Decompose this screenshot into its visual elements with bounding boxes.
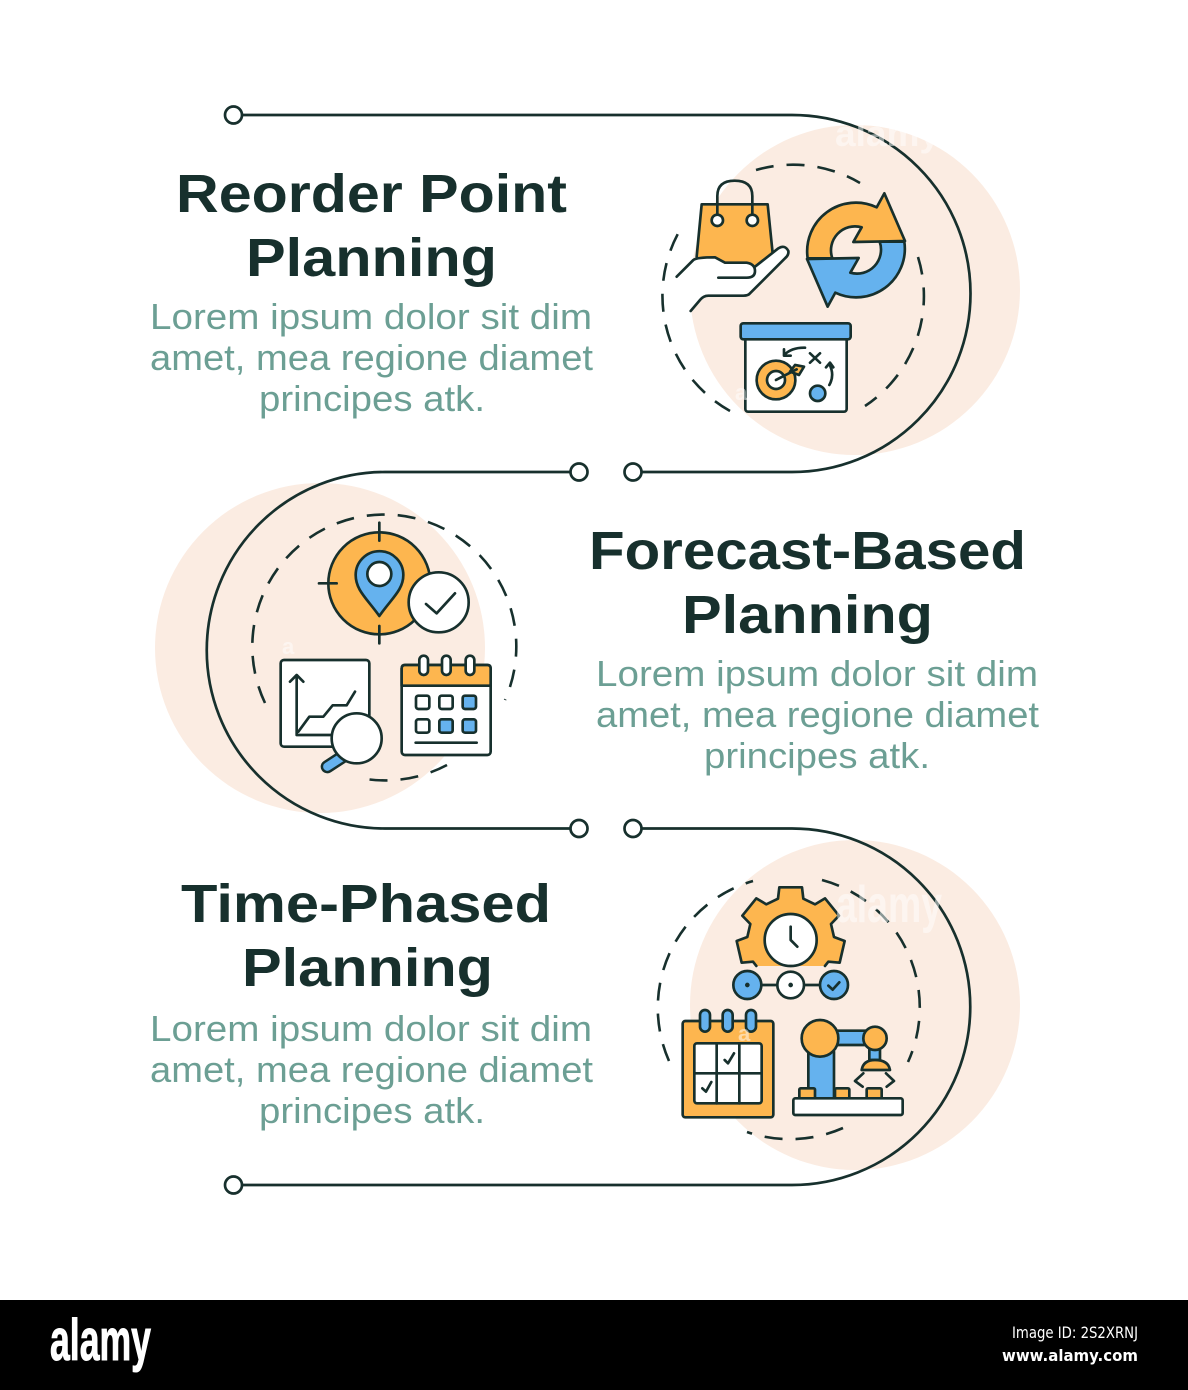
body text: amet, mea regione diamet — [150, 1049, 593, 1090]
icon: chart with magnifier — [281, 660, 382, 767]
body text: Lorem ipsum dolor sit dim — [150, 1008, 592, 1049]
heading: reorder point planning: Planning — [246, 228, 497, 288]
icon: planning calendar — [683, 1010, 773, 1117]
icon group: bag, cycle arrows, strategy board — [677, 181, 905, 412]
connector line with end dots — [207, 106, 971, 1194]
icon: calendar — [402, 656, 491, 755]
footer bar — [0, 1300, 1188, 1390]
heading: forecast-based planning: Forecast-Based — [589, 521, 1026, 581]
heading: time-phased planning: Planning — [242, 938, 493, 998]
body text: amet, mea regione diamet — [596, 694, 1039, 735]
footer logo: alamy — [50, 1308, 151, 1373]
icon: shopping bag in hand — [677, 181, 788, 311]
watermarks: a — [735, 380, 748, 405]
icon group: location target, chart, calendar — [281, 523, 491, 767]
panel: forecast-based planning — [252, 515, 1039, 780]
watermarks: alamy — [836, 876, 942, 934]
watermarks: alamy — [835, 113, 940, 154]
image id: Image ID: 2S2XRNJ — [1012, 1323, 1138, 1342]
body text: amet, mea regione diamet — [150, 337, 593, 378]
heading: reorder point planning: Reorder Point — [176, 164, 567, 224]
body text: Lorem ipsum dolor sit dim — [596, 653, 1038, 694]
heading: forecast-based planning: Planning — [682, 585, 933, 645]
icon: strategy board — [741, 323, 851, 412]
body text: principes atk. — [704, 735, 930, 776]
watermarks: a — [282, 634, 295, 659]
watermarks: a — [738, 1021, 751, 1046]
icon group: gear clock, calendar, robot arm — [683, 887, 903, 1117]
dashed ring — [662, 165, 924, 411]
body text: Lorem ipsum dolor sit dim — [150, 296, 592, 337]
watermarks — [282, 113, 942, 1046]
body text: principes atk. — [259, 378, 485, 419]
body text: principes atk. — [259, 1090, 485, 1131]
dashed ring — [658, 880, 920, 1139]
icon: robot arm — [793, 1020, 903, 1115]
heading: time-phased planning: Time-Phased — [181, 874, 551, 934]
icon: cycle arrows — [807, 193, 905, 307]
icon: location target with check — [319, 523, 469, 643]
site url: www.alamy.com — [1002, 1346, 1138, 1365]
panel: reorder point planning — [150, 164, 924, 419]
icon: gear clock with timeline — [733, 887, 848, 999]
panel: time-phased planning — [150, 874, 920, 1139]
dashed ring — [252, 515, 516, 780]
